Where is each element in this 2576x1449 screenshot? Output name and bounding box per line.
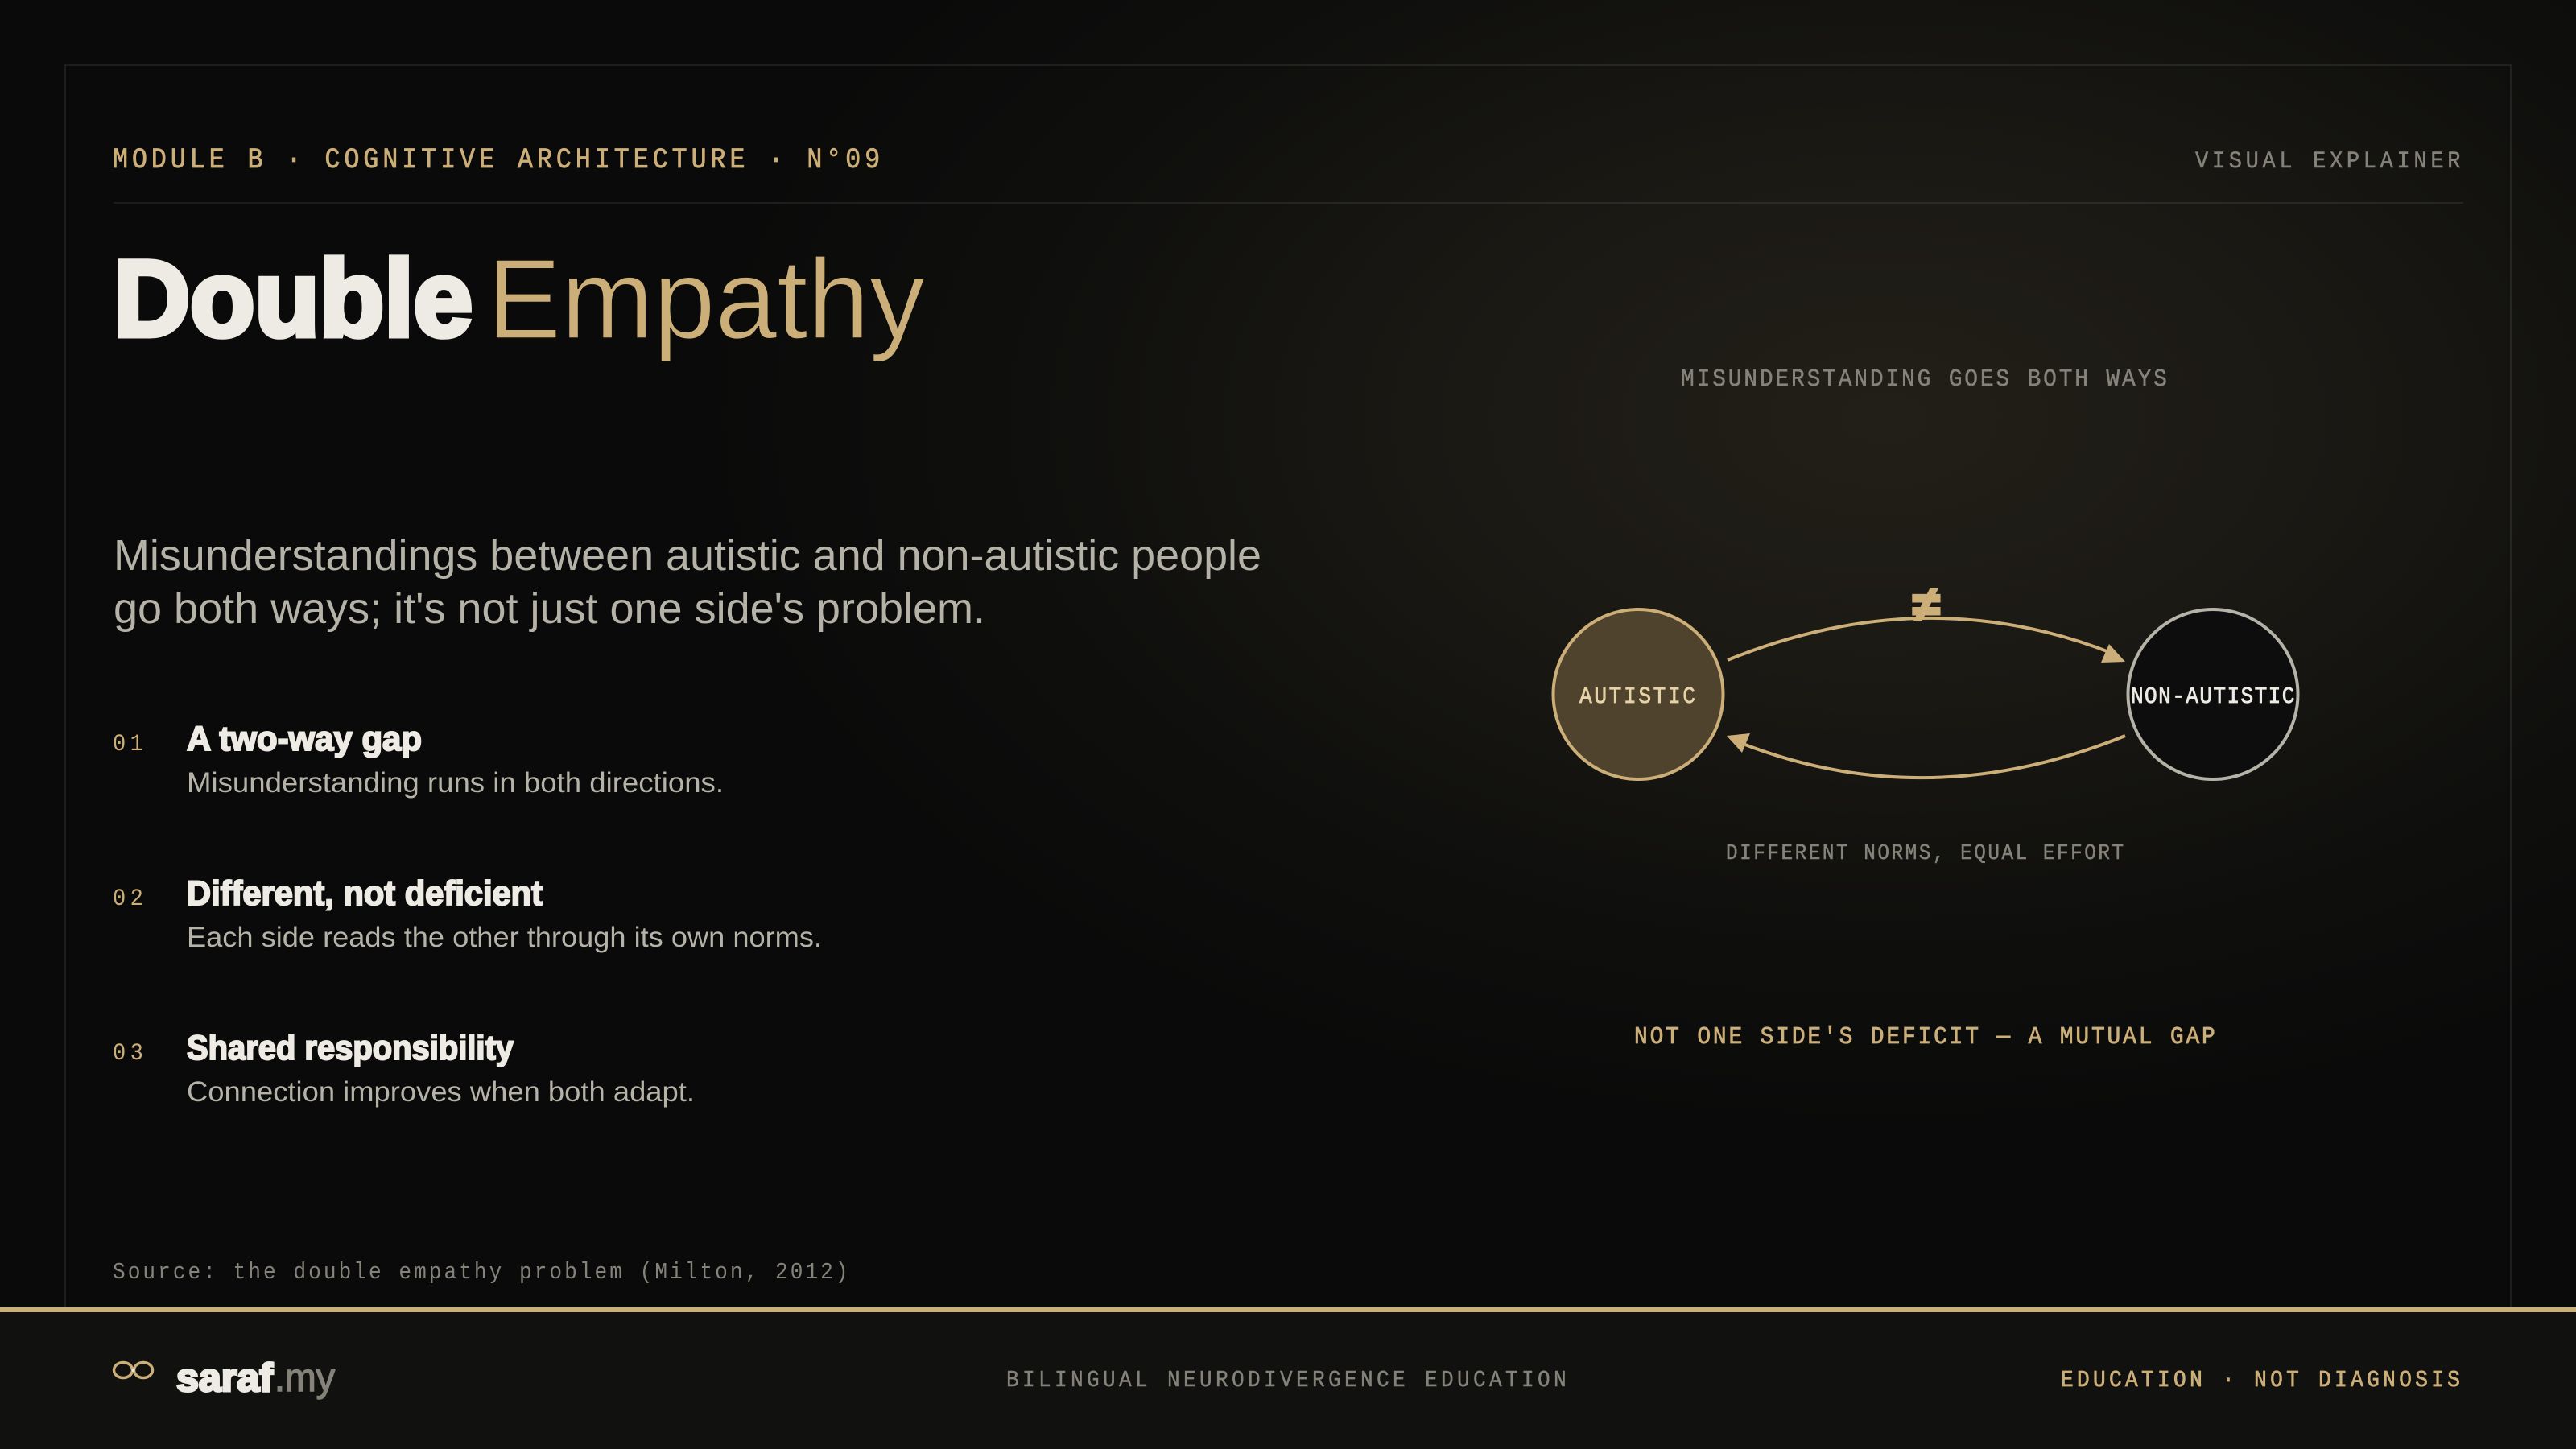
footer accent rule	[0, 1307, 2576, 1312]
intro statement: Misunderstandings between autistic and non-autistic people	[114, 531, 1261, 580]
point 02	[113, 874, 822, 953]
heading 01: A two-way gap	[187, 720, 422, 758]
footer right text: EDUCATION · NOT DIAGNOSIS	[2061, 1368, 2460, 1393]
visual explainer tag: VISUAL EXPLAINER	[2195, 147, 2460, 175]
diagram caption bottom: DIFFERENT NORMS, EQUAL EFFORT	[1726, 841, 2124, 865]
heading 02: Different, not deficient	[187, 874, 543, 913]
description 01: Misunderstanding runs in both directions.	[187, 767, 724, 799]
heading 03: Shared responsibility	[187, 1029, 514, 1067]
arrow: autistic to non-autistic	[1728, 618, 2125, 663]
footer band	[0, 1312, 2576, 1449]
header rule	[114, 202, 2463, 204]
node: non-autistic: NON-AUTISTIC	[2131, 684, 2294, 710]
title	[114, 235, 925, 362]
description 02: Each side reads the other through its own norms.	[187, 922, 822, 953]
brand wordmark: saraf	[176, 1356, 274, 1400]
intro statement	[114, 531, 1261, 633]
node: autistic	[1554, 609, 1723, 779]
takeaway line: NOT ONE SIDE'S DEFICIT — A MUTUAL GAP	[1634, 1022, 2215, 1051]
icon: infinity logo	[114, 1362, 153, 1378]
description 03: Connection improves when both adapt.	[187, 1076, 695, 1108]
brand wordmark	[176, 1356, 335, 1400]
header	[113, 144, 2460, 176]
title word: Double: Double	[114, 239, 473, 359]
node: autistic: AUTISTIC	[1579, 684, 1695, 710]
brand wordmark: .my	[275, 1356, 335, 1400]
number 03: 03	[113, 1039, 143, 1067]
eyebrow: MODULE B · COGNITIVE ARCHITECTURE · N°09	[113, 144, 880, 176]
footer	[0, 1307, 2576, 1449]
number 02: 02	[113, 885, 143, 912]
intro statement: go both ways; it's not just one side's problem.	[114, 584, 985, 633]
diagram caption top: MISUNDERSTANDING GOES BOTH WAYS	[1681, 365, 2167, 393]
source note: Source: the double empathy problem (Milton, 2012)	[113, 1260, 848, 1286]
arrow: non-autistic to autistic	[1727, 733, 2125, 778]
footer center text: BILINGUAL NEURODIVERGENCE EDUCATION	[1006, 1368, 1567, 1393]
not-equal sign: ≠	[1913, 577, 1940, 631]
node: non-autistic	[2128, 609, 2297, 779]
diagram: two-way gap	[1554, 577, 2297, 779]
number 01: 01	[113, 730, 143, 758]
title word: Empathy: Empathy	[487, 235, 925, 362]
point 03	[113, 1029, 695, 1108]
point 01	[113, 720, 724, 799]
